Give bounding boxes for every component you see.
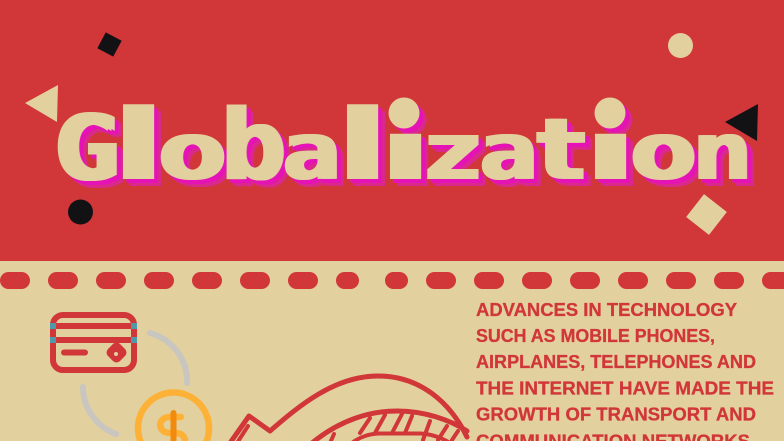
title: G (54, 95, 115, 201)
title: n (692, 106, 750, 199)
panel: red header (0, 0, 784, 261)
text block: technology advances: ADVANCES IN TECHNOLOGY (476, 300, 737, 320)
title: z (423, 105, 479, 198)
title: a (478, 104, 537, 198)
panel: tan lower section (0, 261, 784, 441)
icon: dollar coin (138, 392, 209, 441)
title: i (580, 102, 641, 199)
icon: dot of second i (594, 98, 626, 128)
title: l (332, 88, 393, 202)
icon: tan triangle (25, 85, 58, 122)
title: o (628, 105, 694, 198)
title: o (156, 106, 224, 199)
text block: technology advances: SUCH AS MOBILE PHONES, (476, 326, 715, 346)
icon: black circle (68, 200, 93, 224)
icon: black square (97, 32, 122, 57)
illustration: curved arrow and hatched arc (230, 376, 467, 441)
text block: technology advances: AIRPLANES, TELEPHONES AND (476, 352, 756, 372)
title: l (108, 88, 169, 202)
title: i (375, 102, 436, 199)
text block: technology advances: THE INTERNET HAVE MADE THE (476, 378, 774, 398)
dashed divider (0, 272, 784, 289)
icon: black triangle (725, 104, 758, 141)
title: a (281, 104, 340, 198)
icon: dot of first i (388, 98, 420, 128)
title: b (219, 88, 284, 203)
icon: tan diamond (686, 194, 727, 235)
icon: credit card (50, 315, 137, 370)
title (58, 98, 754, 188)
icon: tan circle (668, 33, 693, 58)
text block: technology advances: GROWTH OF TRANSPORT AND (476, 404, 756, 424)
title: t (535, 100, 583, 199)
text block: technology advances (476, 300, 774, 441)
arrow: grey cycle arcs (83, 333, 187, 434)
